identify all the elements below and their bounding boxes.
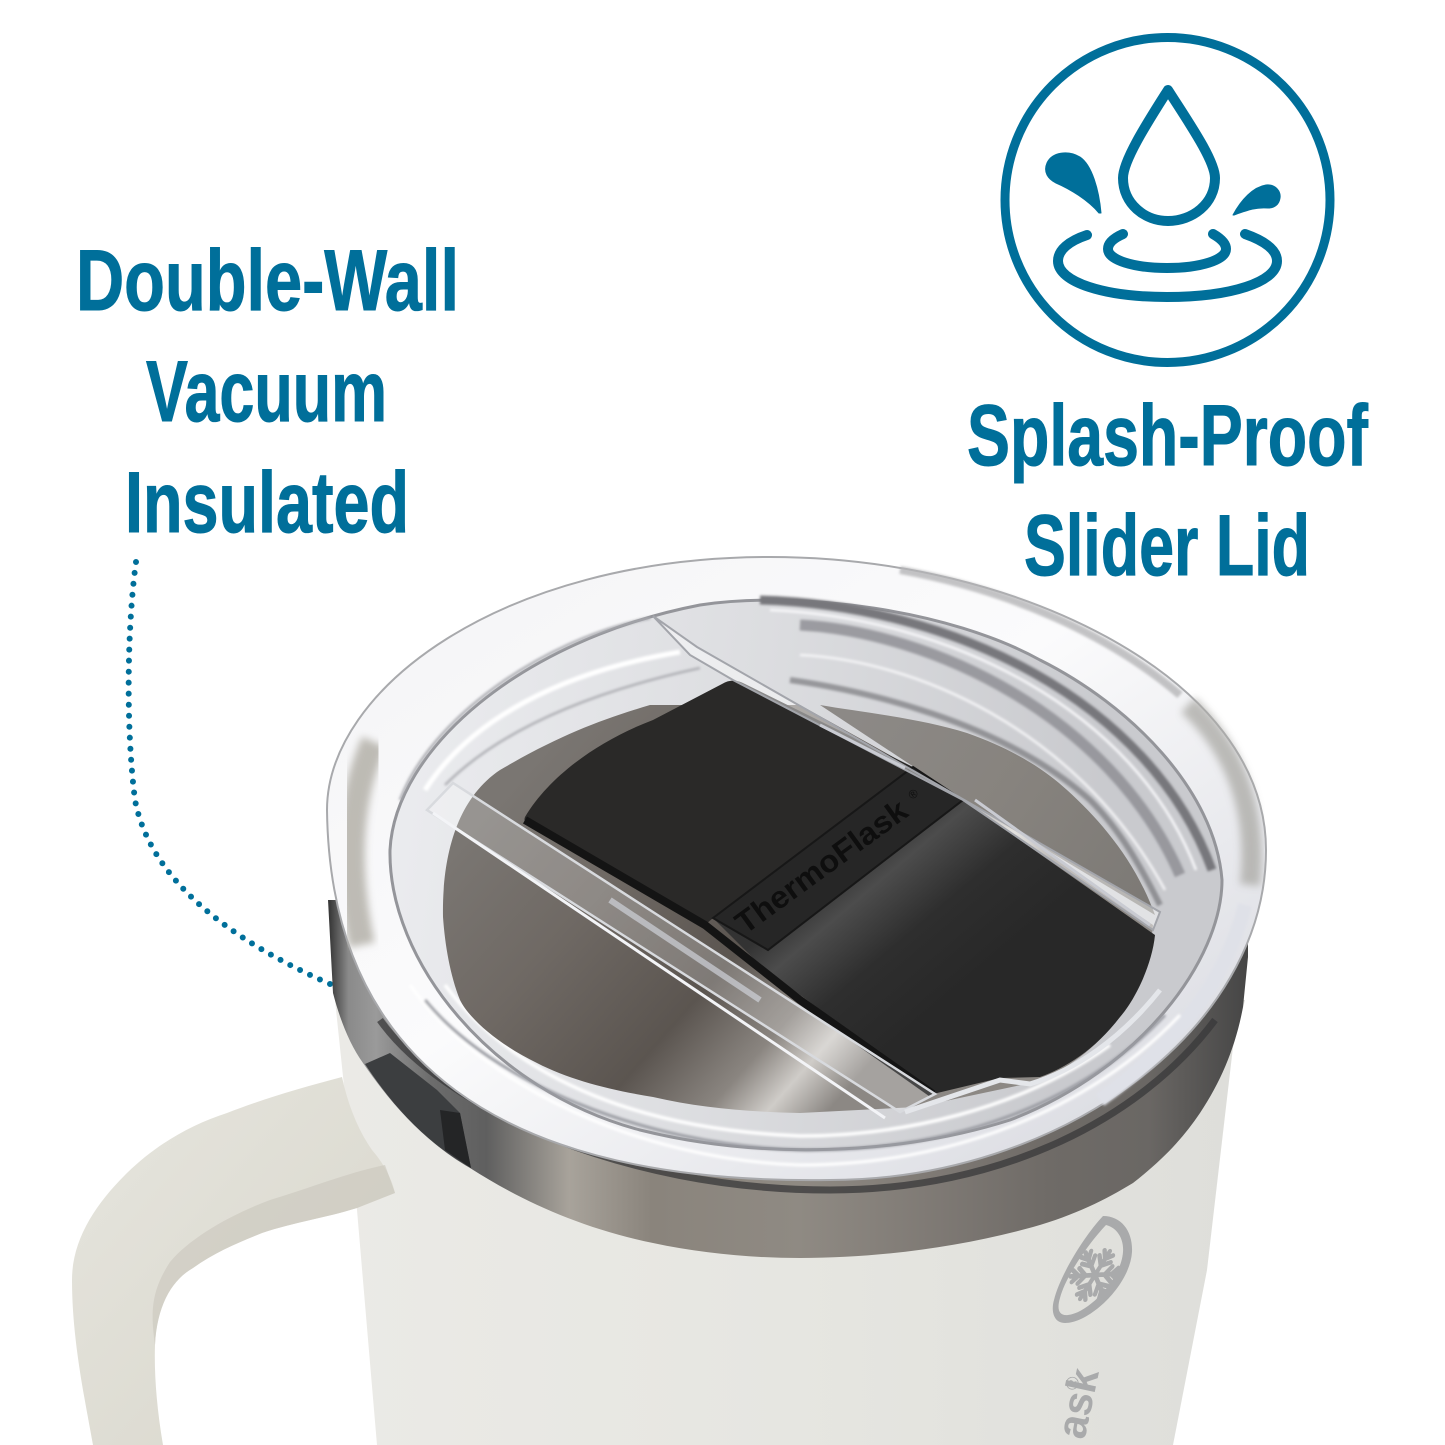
clear slider lid: [327, 557, 1266, 1190]
slider: ridge with logo: ThermoFlask: [729, 792, 915, 941]
rail: lower: [427, 783, 935, 1118]
lid ring stripes: [400, 600, 1212, 1165]
mug logo text: ask: [1047, 1363, 1108, 1442]
slider: lower panel: [713, 800, 1155, 1094]
mug body: [335, 1000, 1245, 1445]
slider: ridge with logo: [713, 767, 963, 950]
lid shadow line: [380, 1020, 1215, 1190]
lid outer rim: [327, 557, 1266, 1180]
heading: Double-Wall Vacuum Insulated: Insulated: [125, 455, 409, 551]
rail: upper: [653, 616, 1160, 930]
lid front highlight: [905, 990, 1160, 1112]
icon: water drop splash in circle: [1005, 38, 1330, 362]
mug logo text: ®: [1061, 1375, 1084, 1392]
mug logo: snowflake badge: [1053, 1216, 1132, 1323]
lid inner ring: [390, 600, 1222, 1150]
dotted leader line: [129, 562, 330, 984]
heading: Double-Wall Vacuum Insulated: Vacuum: [146, 344, 387, 440]
heading: Splash-Proof Slider Lid: [967, 388, 1368, 594]
heading: Double-Wall Vacuum Insulated: [76, 233, 459, 551]
mug handle: [72, 1077, 395, 1445]
black slider: [524, 681, 1155, 1094]
steel interior seen through lid: [443, 705, 1153, 1113]
heading: Double-Wall Vacuum Insulated: Double-Wall: [76, 233, 459, 329]
heading: Splash-Proof Slider Lid: Slider Lid: [1024, 498, 1310, 594]
mug photo illustration: [72, 557, 1266, 1445]
slider: ridge with logo: ®: [906, 786, 921, 802]
slider: upper panel: [524, 681, 913, 925]
steel rim band: [328, 900, 1248, 1258]
